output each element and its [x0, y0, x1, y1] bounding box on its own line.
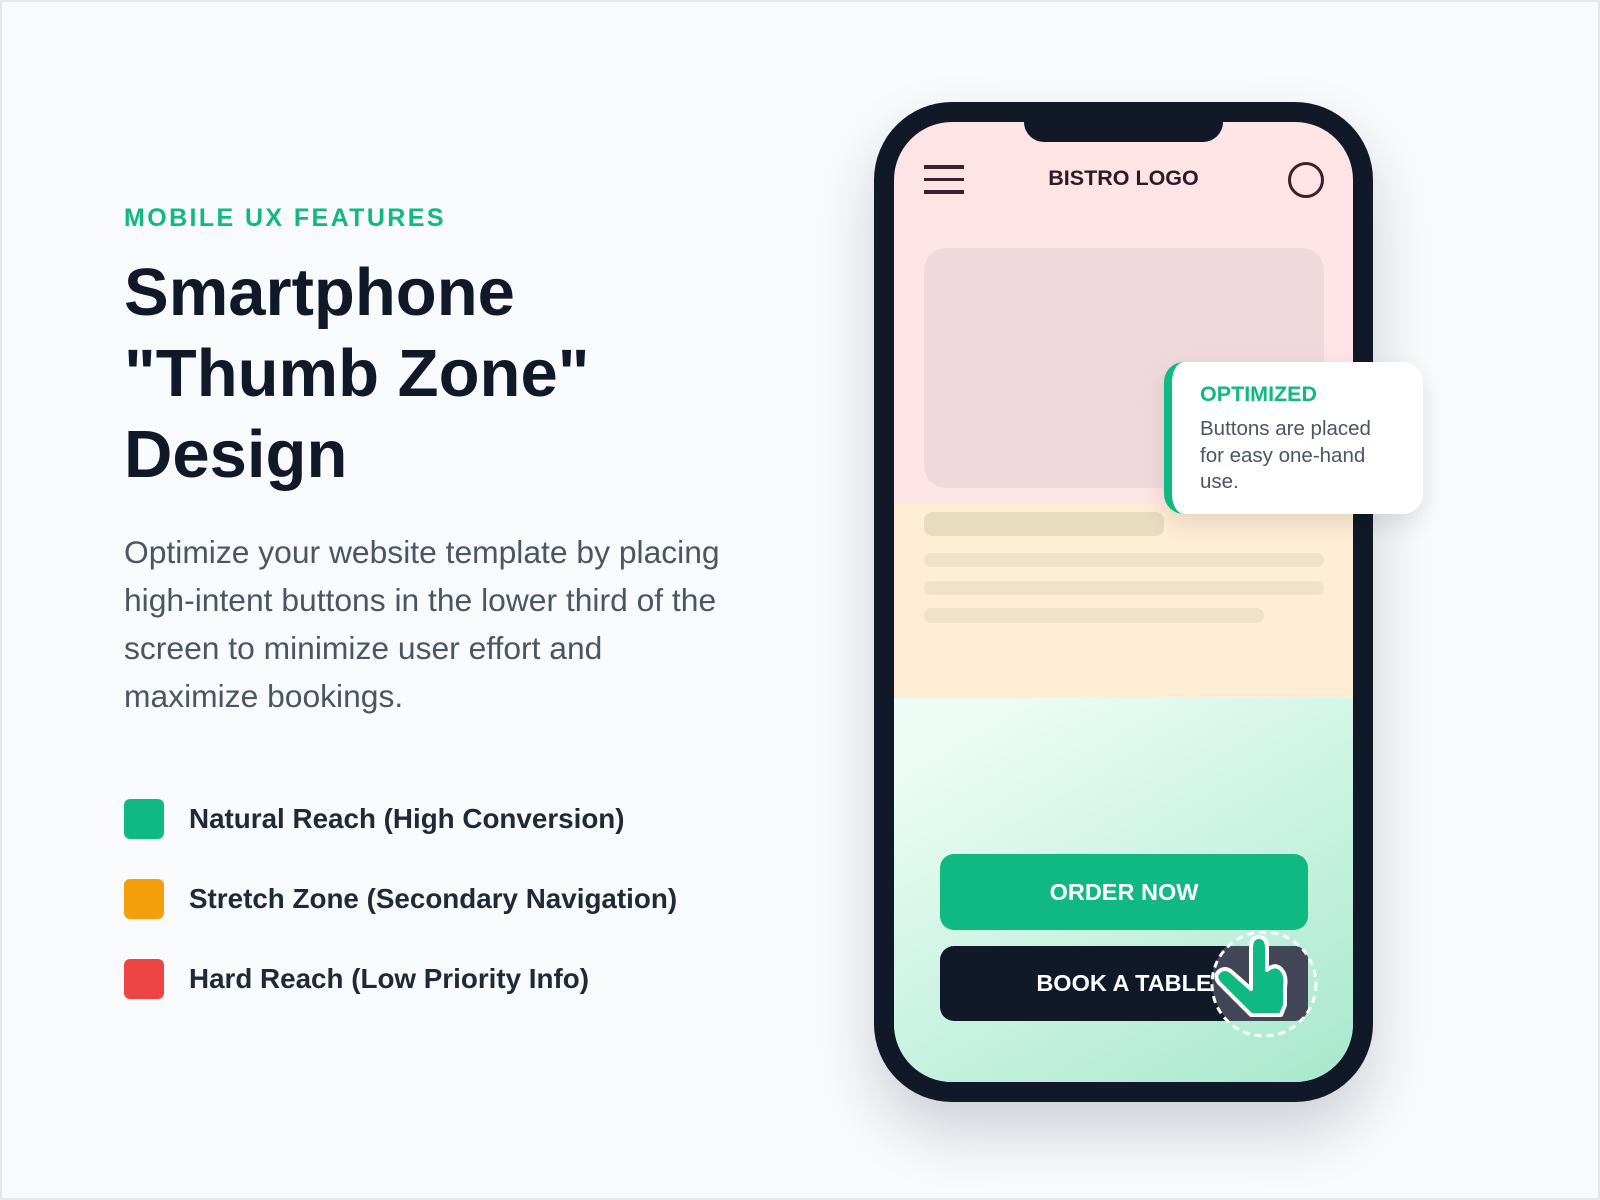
legend	[124, 799, 677, 999]
title: Design	[124, 417, 347, 492]
button: order now: ORDER NOW	[1050, 879, 1198, 905]
callout: optimized	[1164, 362, 1423, 514]
title: "Thumb Zone"	[124, 336, 589, 411]
zone: stretch	[894, 504, 1353, 698]
image placeholder	[924, 248, 1324, 488]
legend item: natural reach: Natural Reach (High Conversion)	[189, 803, 625, 834]
notch	[1024, 122, 1223, 142]
legend item: stretch zone	[124, 879, 677, 919]
legend item: hard reach: Hard Reach (Low Priority Info)	[189, 963, 589, 994]
phone mockup	[874, 102, 1373, 1102]
icon: profile circle	[1288, 162, 1324, 198]
phone screen	[894, 122, 1353, 1082]
icon: tap hand	[1210, 930, 1318, 1038]
callout: optimized: OPTIMIZED	[1200, 382, 1317, 406]
text placeholders	[924, 512, 1324, 623]
description paragraph: Optimize your website template by placing high-intent buttons in the lower third of the screen to minimize user effort and maximize bookings.	[124, 534, 720, 714]
eyebrow label: MOBILE UX FEATURES	[124, 204, 446, 232]
legend item: hard reach	[124, 959, 589, 999]
logo text: BISTRO LOGO	[1048, 166, 1199, 190]
title: Smartphone	[124, 255, 515, 330]
legend item: stretch zone: Stretch Zone (Secondary Navigation)	[189, 883, 677, 914]
button: book a table	[940, 946, 1308, 1021]
button: order now	[940, 854, 1308, 930]
callout: optimized: Buttons are placed for easy one-hand use.	[1200, 417, 1371, 493]
icon: hamburger menu	[924, 165, 964, 194]
button: book a table: BOOK A TABLE	[1036, 970, 1212, 996]
title	[124, 255, 589, 492]
legend item: natural reach	[124, 799, 625, 839]
zone: natural reach	[894, 698, 1353, 1082]
